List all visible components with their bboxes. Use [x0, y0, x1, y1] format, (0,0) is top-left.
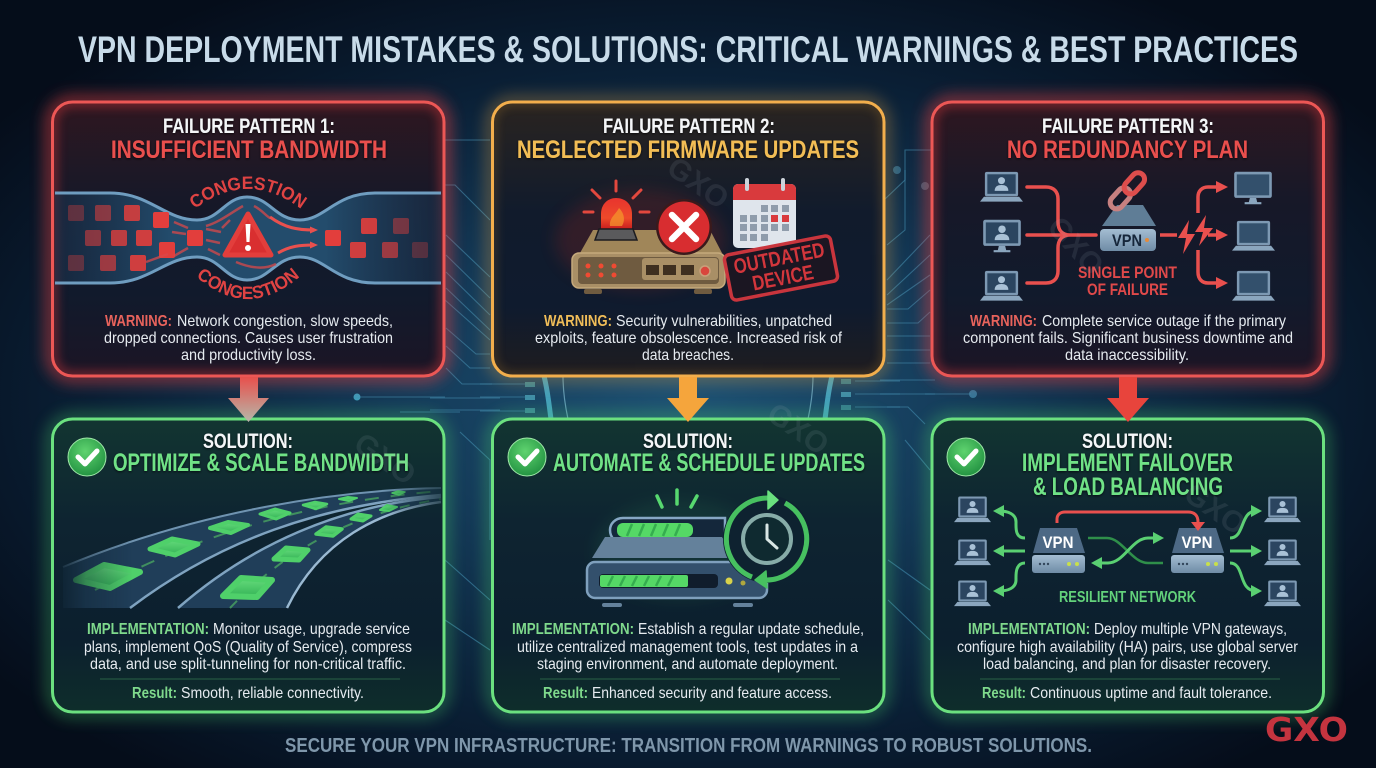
watermarks: GXO — [761, 397, 835, 462]
implementation text 2: Result: — [543, 685, 588, 702]
warning text 2: exploits, feature obsolescence. Increased risk of — [535, 330, 842, 347]
watermarks: GXO — [348, 427, 422, 492]
heading: failure pattern 1: FAILURE PATTERN 1: — [163, 115, 335, 138]
icon: check badge 1 — [68, 438, 106, 476]
heading: solution 1: OPTIMIZE & SCALE BANDWIDTH — [113, 449, 409, 477]
implementation text 1: Smooth, reliable connectivity. — [181, 685, 364, 702]
label: congestion top: CONGESTION — [190, 176, 308, 208]
implementation text 1: Monitor usage, upgrade service — [213, 621, 410, 638]
icon: redundant VPN gateways diagram — [954, 496, 1301, 606]
label: congestion bottom: CONGESTION — [198, 268, 300, 300]
arrow: failure 2 to solution 2 — [667, 377, 709, 422]
panel: solution 3 — [932, 419, 1324, 712]
warning text 3: WARNING: — [970, 313, 1037, 330]
watermarks: GXO — [661, 151, 735, 216]
heading: solution 3: IMPLEMENT FAILOVER — [1022, 449, 1233, 477]
icon: redundant VPN gateways diagram: RESILIENT NETWORK — [1059, 589, 1196, 606]
warning text 3: Complete service outage if the primary — [1042, 313, 1286, 330]
icon: single point of failure diagram: OF FAILURE — [1087, 280, 1168, 299]
warning text 2: Security vulnerabilities, unpatched — [616, 313, 832, 330]
arrow: failure 1 to solution 1 — [228, 377, 269, 422]
implementation text 1: IMPLEMENTATION: — [87, 621, 209, 638]
icon: check badge 3 — [947, 438, 985, 476]
warning text 3 — [963, 313, 1293, 364]
heading: solution 1: SOLUTION: — [203, 430, 293, 453]
watermarks: GXO — [1178, 477, 1252, 542]
icon: redundant VPN gateways diagram: VPN — [1042, 533, 1074, 552]
icon: check badge 2 — [508, 438, 546, 476]
icon: server with update progress and clock — [587, 490, 811, 607]
heading: failure pattern 1: INSUFFICIENT BANDWIDTH — [111, 136, 387, 164]
heading: failure pattern 3 — [1007, 115, 1248, 164]
implementation text 3: Result: — [982, 685, 1026, 702]
warning text 2: WARNING: — [544, 313, 612, 330]
icon: single point of failure diagram — [980, 170, 1275, 301]
panel: failure pattern 2 — [492, 102, 884, 376]
heading: failure pattern 2 — [517, 115, 859, 164]
stamp: outdated device: OUTDATED — [732, 239, 827, 279]
heading: solution 2 — [553, 430, 865, 477]
warning text 1: Network congestion, slow speeds, — [177, 313, 393, 330]
heading: solution 2: SOLUTION: — [643, 430, 733, 453]
icon: widened highway with green data packets — [63, 488, 441, 608]
warning text 2 — [535, 313, 842, 364]
implementation text 2: IMPLEMENTATION: — [512, 621, 634, 638]
heading: solution 1 — [113, 430, 409, 477]
circuit board lines — [354, 140, 977, 650]
implementation text 2: utilize centralized management tools, test updates in a — [517, 639, 858, 656]
heading: solution 3: SOLUTION: — [1082, 430, 1173, 453]
icon: congested network pipe — [55, 176, 441, 300]
warning text 1: dropped connections. Causes user frustration — [104, 330, 393, 347]
implementation text 2 — [512, 621, 864, 702]
panel: solution 2 — [492, 419, 884, 712]
stamp: outdated device — [724, 235, 838, 301]
panel: failure pattern 3 — [932, 102, 1324, 376]
implementation text 2: Establish a regular update schedule, — [638, 621, 864, 638]
implementation text 3: configure high availability (HA) pairs, use global server — [957, 639, 1299, 656]
implementation text 3 — [957, 621, 1299, 702]
implementation text 2: staging environment, and automate deployment. — [537, 656, 838, 673]
heading: failure pattern 3: FAILURE PATTERN 3: — [1042, 115, 1214, 138]
warning text 1: and productivity loss. — [181, 347, 316, 364]
warning text 2: data breaches. — [642, 347, 734, 364]
logo: GXO: GXO — [1265, 710, 1348, 749]
heading: failure pattern 3: NO REDUNDANCY PLAN — [1007, 136, 1248, 164]
implementation text 3: Continuous uptime and fault tolerance. — [1030, 685, 1272, 702]
heading: failure pattern 1 — [111, 115, 387, 164]
implementation text 3: IMPLEMENTATION: — [968, 621, 1090, 638]
icon: redundant VPN gateways diagram: VPN — [1182, 533, 1212, 552]
heading: failure pattern 2: NEGLECTED FIRMWARE UPDATES — [517, 136, 859, 164]
implementation text 1: plans, implement QoS (Quality of Service), compress — [84, 639, 412, 656]
implementation text 1: data, and use split-tunneling for non-critical traffic. — [90, 656, 406, 673]
panel: solution 1 — [52, 419, 444, 712]
icon: single point of failure diagram: VPN — [1112, 231, 1142, 250]
heading: solution 2: AUTOMATE & SCHEDULE UPDATES — [553, 449, 865, 477]
implementation text 1 — [84, 621, 412, 702]
footer tagline: SECURE YOUR VPN INFRASTRUCTURE: TRANSITION FROM WARNINGS TO ROBUST SOLUTIONS. — [285, 735, 1092, 757]
icon: outdated router with siren — [555, 178, 838, 301]
watermarks: GXO — [1041, 211, 1110, 282]
implementation text 3: load balancing, and plan for disaster recovery. — [983, 656, 1271, 673]
warning text 3: component fails. Significant business downtime and — [963, 330, 1293, 347]
warning text 3: data inaccessibility. — [1065, 347, 1189, 364]
heading: solution 3: & LOAD BALANCING — [1033, 473, 1223, 501]
warning text 1: WARNING: — [105, 313, 172, 330]
watermarks — [348, 151, 1252, 542]
panel: failure pattern 1 — [34, 84, 462, 394]
warning text 1 — [104, 313, 393, 364]
arrow: failure 3 to solution 3 — [1107, 377, 1149, 422]
icon: single point of failure diagram: SINGLE POINT — [1078, 263, 1177, 282]
implementation text 3: Deploy multiple VPN gateways, — [1094, 621, 1287, 638]
stamp: outdated device: DEVICE — [750, 261, 816, 296]
implementation text 1: Result: — [132, 685, 177, 702]
heading: failure pattern 2: FAILURE PATTERN 2: — [603, 115, 775, 138]
heading: solution 3 — [1022, 430, 1233, 501]
implementation text 2: Enhanced security and feature access. — [592, 685, 832, 702]
